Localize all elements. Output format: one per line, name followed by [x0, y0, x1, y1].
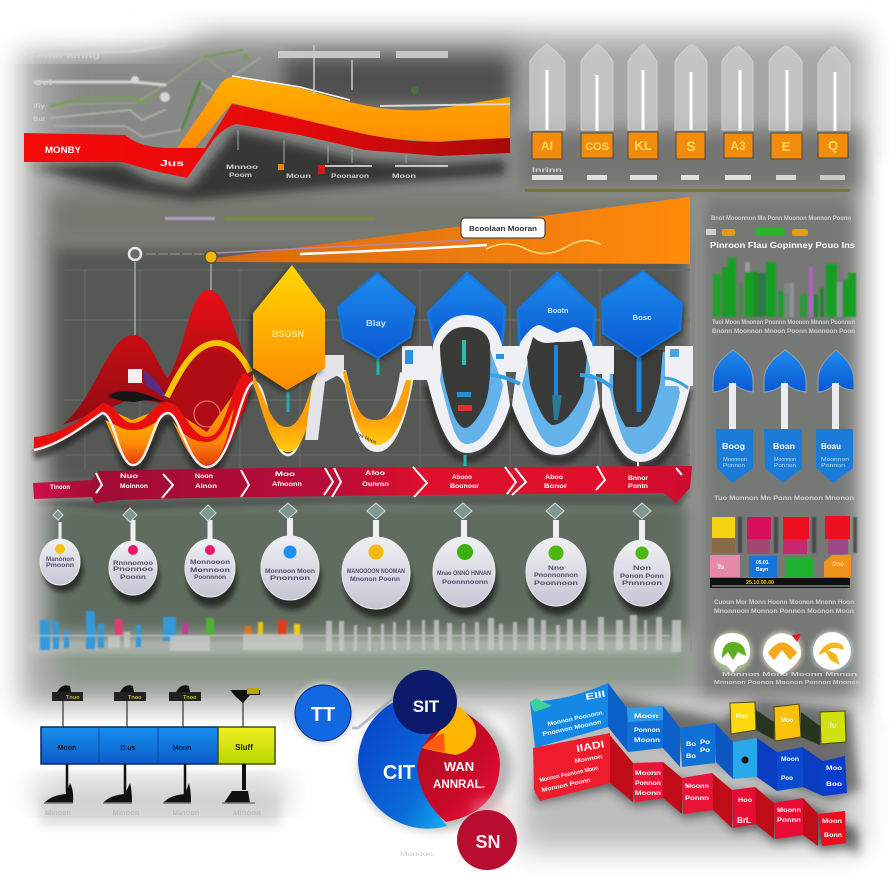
tube 4: [675, 44, 707, 180]
blue ribbon: [530, 683, 847, 796]
pendant 7: Pnonnonnon: [534, 573, 578, 579]
table: pin icons above bar: Tnuo: [66, 695, 80, 701]
pendant 6: Poonnnoonn: [442, 580, 488, 586]
blue ribbon: Moonn: [634, 738, 660, 744]
table: pin icons above bar: Tnoo: [183, 695, 197, 701]
red ribbon: Moon: [822, 819, 842, 825]
panel: green bar chart: Tuol Moon Mnonon Pnonnn Moonon Mnnon Poonnon: [712, 320, 855, 326]
chart: top-left trend lines: [35, 45, 260, 137]
red ribbon: Moonn: [685, 784, 709, 790]
blue ribbon: Pnonnon Moonon: [542, 720, 602, 738]
panel: coloured cube grid: [710, 496, 857, 615]
red ribbon: Monnon: [574, 754, 603, 765]
arrow band: process steps: Boonoor: [450, 484, 480, 490]
table: pin icons above bar: [52, 685, 260, 727]
panel: green bar chart: [706, 216, 856, 335]
label strip: top header: [278, 45, 448, 94]
ribbon chart: red and orange band: [24, 76, 510, 200]
icon: orange badge: [763, 633, 801, 675]
arrow band: process steps: Nuo: [120, 474, 139, 480]
table: stands below bar: Minoon: [112, 810, 140, 817]
circle: SIT: [393, 670, 457, 734]
pendant 3: Poonnnon: [194, 575, 226, 581]
red ribbon: IIADI: [576, 739, 605, 755]
hexagon: blue 1: [338, 273, 417, 361]
pendant 8: [614, 503, 672, 615]
pendant 6: [433, 503, 497, 616]
hexagon: yellow: [250, 265, 325, 393]
labels under ribbon: Poom: [229, 173, 252, 179]
channel 1: [427, 315, 510, 453]
venn: overlapping circles: [292, 670, 517, 870]
arrow band: process steps: Bnnor: [628, 476, 649, 482]
labels under ribbon: Moun: [286, 174, 312, 180]
wave: red ribbon and orange pits: [34, 355, 414, 467]
blue ribbon: Bo: [686, 754, 696, 760]
circle: WAN: [417, 706, 500, 822]
blue ribbon: Ponnon: [634, 728, 660, 734]
circle: CIT: CIT: [383, 762, 415, 784]
tube 6: [769, 46, 802, 180]
table: blue and yellow timeline bar: D.us: [120, 745, 136, 752]
panel: glass tubes with orange icons: [530, 44, 850, 180]
hexagon: yellow: BSOSN: [272, 329, 304, 339]
circle: SIT: SIT: [413, 697, 440, 716]
table: blue and yellow timeline bar: Sluff: [235, 743, 253, 752]
pendant 3: [185, 505, 237, 607]
icon: yellow badge: [813, 632, 851, 670]
pendant 5: Mnonon Poonn: [350, 577, 400, 583]
pendant 4: [261, 503, 321, 610]
blue ribbon: Moon: [634, 714, 658, 720]
pendant 8: Pnnnoon: [622, 581, 663, 587]
arrow band: process steps: [33, 466, 692, 510]
arrow 3: Boau: [821, 442, 841, 451]
tube 1: AI: [541, 139, 553, 153]
panel: green bar chart: Bnot Mooonnon Mn Ponn Moonon Monnon Poonn: [711, 216, 851, 222]
tube 1: Inrinn: [532, 168, 563, 174]
wave: blue water channels: [402, 273, 693, 470]
labels under ribbon: Moon: [392, 174, 416, 180]
labels under ribbon: Mnnoo: [226, 165, 259, 171]
arrow band: process steps: Noon: [195, 474, 213, 480]
circle: SN: [457, 798, 517, 870]
header: orange wedge with pill label: Bcoolaan Mooran: [469, 226, 537, 233]
red ribbon: Bonn: [824, 833, 842, 839]
tube 4: S: [686, 138, 696, 154]
red ribbon: Moonn: [635, 771, 661, 777]
labels under ribbon: [226, 130, 448, 180]
tube 5: [722, 46, 753, 180]
pendant 3: Monnooon: [190, 560, 230, 566]
icons: three circular badges: [711, 630, 860, 686]
label: top-left trend series names: [33, 53, 100, 123]
panel: coloured cube grid: 25.10.00.00: [746, 580, 774, 586]
panel: coloured cube grid: Bayn: [756, 567, 768, 573]
yellow sticky squares: [730, 702, 846, 745]
label: top-left trend series names: Cnaf ainng: [35, 53, 100, 60]
pendant 7: [526, 503, 588, 615]
arrow band: process steps: Bonor: [544, 484, 568, 490]
pendant 1: Manonon: [46, 557, 74, 563]
tube 1: [530, 44, 565, 180]
blue ribbon: EIII: [585, 689, 606, 702]
circle: WAN: ANNRAL.: [433, 777, 485, 791]
markers: ring and yellow dot: [129, 248, 217, 340]
pendant 7: Poonnoon: [534, 581, 578, 587]
blue ribbon: Po: [700, 748, 710, 754]
table: stands below bar: Minoon: [172, 810, 200, 817]
arrow band: process steps: Pontn: [628, 484, 648, 490]
arrow 1: Boog: [722, 442, 745, 451]
venn: overlapping circles: Monoon: [400, 852, 433, 858]
tube 3: KL: [634, 138, 652, 153]
panel: coloured cube grid: 05.01: [756, 560, 769, 566]
arrow 3: Moonnon: [821, 457, 849, 463]
wave: red mountains: [34, 290, 252, 472]
arrow 1: Ponnon: [723, 463, 745, 469]
tube 3: [628, 44, 658, 180]
arrow 2: Boan: [773, 442, 795, 451]
pendant 2: Pnonnoo: [113, 567, 154, 573]
table: blue and yellow timeline bar: [34, 722, 282, 770]
table: stands below bar: [40, 764, 280, 825]
table: blue and yellow timeline bar: Moon: [58, 745, 76, 752]
hexagon: blue 1: Blay: [366, 319, 387, 328]
pendant 5: MANOOOON NOOMAN: [347, 569, 405, 575]
header: orange wedge with pill label: [215, 197, 690, 264]
pendant 7: Nno: [548, 566, 564, 572]
panel: coloured cube grid: Tuo Monnon Mn Ponn Moonon Mnonon: [714, 496, 854, 502]
blue hexagon 2 behind arch: [428, 273, 505, 345]
wedge: orange overlap: [422, 706, 476, 755]
tube 2: COS: [585, 141, 609, 153]
tube 6: E: [782, 139, 791, 154]
tube 2: [581, 44, 613, 180]
panel: coloured cube grid: Tu: [717, 565, 724, 571]
icons: three circular badges: Monnon Mono Moonn Mnnon: [722, 672, 857, 678]
arrow 1: Moonnon: [723, 457, 747, 463]
pendant 1: Pmoonn: [46, 563, 74, 569]
pendants: eight info discs: [40, 503, 672, 618]
panel: coloured cube grid: Ono: [832, 562, 844, 568]
blue ribbon: Poo: [781, 776, 793, 782]
red ribbon: Ponnon: [635, 781, 661, 787]
pendant 4: Pnonnon: [270, 576, 311, 582]
label: top-left trend series names: ifiy: [33, 104, 46, 110]
red ribbon: Moonn: [635, 791, 661, 797]
arrow band: process steps: Tinoon: [50, 485, 70, 491]
icon: green badge: [714, 633, 750, 673]
channel 3: [602, 352, 690, 462]
table: stands below bar: Minoon: [45, 810, 71, 817]
channel 2: [512, 325, 600, 455]
yellow sticky squares: Moo: [736, 714, 748, 720]
pendant 3: Monnoon: [190, 568, 230, 574]
blue ribbon: Moo: [826, 766, 842, 772]
pendant 2: Poonn: [120, 575, 146, 581]
red ribbon: Ponnn: [685, 796, 709, 802]
stepped ribbon: blue and red panels: [530, 683, 860, 855]
arrow band: process steps: Moo: [275, 472, 296, 478]
red ribbon: [533, 733, 846, 846]
pendant 8: Ponon Ponn: [620, 574, 664, 580]
arrow 3: Ponnon: [821, 463, 845, 469]
pendant 5: [342, 503, 412, 618]
red ribbon: Moonn: [777, 808, 801, 814]
panel: green bar chart: Bnonn Moonnon Mnoon Poonn Monnoon Poon: [712, 329, 855, 335]
blue hexagon 3 behind arch: [518, 273, 595, 350]
hexagon: blue 3 label: Bootn: [548, 308, 568, 315]
pendant 8: Non: [633, 566, 652, 572]
circle: WAN: WAN: [444, 759, 474, 774]
arrow band: process steps: Afnoonn: [272, 482, 302, 488]
arrow band: process steps: Aboo: [545, 475, 563, 481]
arrow band: process steps: Ounron: [362, 482, 389, 488]
wave: red ribbon and orange pits: Mos Hoos: [353, 430, 378, 446]
arrow 2: Moonnon: [774, 457, 796, 463]
pendant 1: [40, 510, 83, 592]
circle: CIT: [358, 698, 447, 829]
labels under ribbon: Poonaron: [331, 174, 369, 180]
tube 7: Q: [828, 138, 838, 153]
blue ribbon: Moon: [781, 757, 799, 763]
hexagon: blue 4: [602, 271, 684, 360]
panel: coloured cube grid: Cuoun Mor Monn Hoonn Moonon Mnonn Hoon: [714, 600, 854, 606]
blue ribbon: Po: [700, 740, 710, 746]
tube 7: [818, 46, 850, 180]
arrow 3: [816, 350, 854, 483]
tube 5: A3: [730, 139, 746, 153]
ribbon chart: red and orange band: MONBY: [45, 145, 81, 155]
ribbon chart: red and orange band: Jus: [160, 159, 185, 168]
pendant 4: Monnoon Moon: [265, 569, 315, 575]
arrow 1: [713, 350, 753, 483]
table: stands below bar: Minoon: [233, 810, 261, 817]
hexagon: blue 4: Bosc: [632, 315, 652, 322]
red ribbon: BrL: [737, 816, 751, 825]
red ribbon: Monnon Poononn Moon: [539, 766, 599, 784]
label: top-left trend series names: Cel: [34, 80, 52, 87]
blue ribbon: Boo: [826, 782, 842, 788]
circle: TT: [292, 682, 354, 744]
panel: three blue arrows with shields: [713, 350, 854, 483]
panel: coloured cube grid: Mnonnoon Monnon Ponnon Moonon Moon: [714, 609, 854, 615]
label: top-left trend series names: Bul: [33, 117, 45, 123]
red ribbon: Monnon Poonn: [541, 778, 592, 794]
arrow 2: Ponnon: [774, 463, 796, 469]
blue ribbon: Bo: [686, 742, 696, 748]
bar chart: strip of small bars: [30, 611, 681, 654]
pendant 2: Rnnnomoo: [113, 561, 153, 567]
blue ribbon: Monnon Poononn: [547, 710, 604, 728]
table: blue and yellow timeline bar: Moon: [173, 745, 191, 752]
circle: SN: SN: [475, 832, 501, 852]
arrow band: process steps: Moinnon: [120, 484, 148, 490]
red ribbon: Ponnn: [777, 818, 801, 824]
icons: three circular badges: Mnnonon Poonon Moonon Ponnon Mnonon: [714, 680, 860, 686]
pendant 6: Mnao ONNO HNNAN: [437, 571, 491, 577]
arrow band: process steps: Ainon: [195, 484, 217, 490]
arrow 2: [764, 350, 806, 483]
arrow band: process steps: Afoo: [365, 471, 385, 477]
circle: TT: TT: [311, 704, 335, 726]
yellow sticky squares: Moo: [781, 718, 793, 724]
yellow sticky squares: Iu: [829, 721, 837, 730]
red ribbon: Hoo: [738, 798, 752, 804]
arrow band: process steps: Abooo: [452, 475, 472, 481]
panel: green bar chart: Pinroon Flau Gopinney Pouo Ins: [710, 241, 856, 250]
pendant 2: [109, 508, 159, 604]
table: pin icons above bar: Tnoo: [128, 695, 142, 701]
